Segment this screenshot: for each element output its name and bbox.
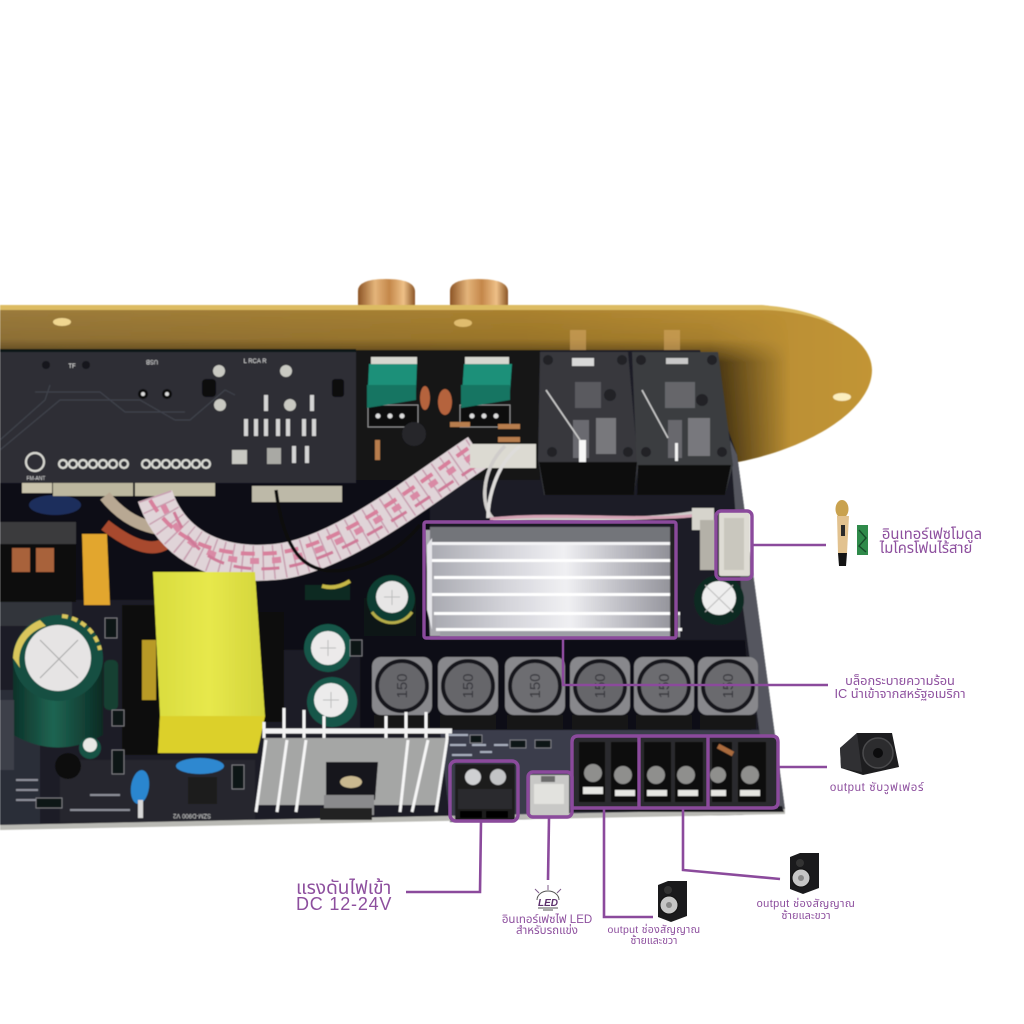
label: output subwoofer: output ซับวูฟเฟอร์ [830, 781, 924, 794]
relays [538, 352, 733, 495]
label: IC heat sink: IC นำเข้าจากสหรัฐอเมริกา [834, 686, 966, 701]
small electrolytic capacitors [304, 575, 744, 727]
green input terminal block [455, 764, 515, 822]
label: wireless mic module: อินเทอร์เฟซโมดูล [882, 527, 982, 543]
blue ceramic capacitors and optocoupler: SZM-D900 V2 [172, 812, 211, 818]
copper inductor and yellow block [0, 522, 110, 626]
label: wireless mic module [879, 527, 982, 557]
audio module daughterboard [0, 349, 356, 483]
row of 150 inductors: 150 [656, 673, 673, 699]
output screw terminals [572, 737, 778, 809]
audio module daughterboard: FM-ANT [27, 476, 45, 482]
icon: LED lamp: LED [538, 898, 558, 909]
label: IC heat sink: บล็อกระบายความร้อน [845, 673, 955, 688]
label: output left and right channel, upper: ซ้ายและขวา [781, 910, 831, 922]
label: input voltage [296, 876, 392, 914]
cream connectors and ribbon cable [22, 444, 716, 571]
highlight frames [424, 511, 778, 821]
audio module daughterboard: L RCA R [243, 359, 267, 365]
icon: green wireless module [857, 525, 868, 555]
audio module daughterboard: USB [146, 358, 158, 364]
upper heatsink [425, 527, 682, 637]
label: output left and right channel, upper [757, 897, 855, 922]
label: wireless mic module: ไมโครโฟนไร้สาย [879, 541, 972, 557]
circuit board base [0, 350, 785, 830]
lower heatsink with regulator [256, 708, 452, 820]
small SMD parts on power section [36, 618, 551, 808]
row of 150 inductors: 150 [720, 673, 737, 699]
icon: wireless microphone [836, 500, 849, 566]
label: output left and right channel, lower [608, 923, 700, 947]
icon: LED lamp [535, 885, 561, 910]
label: IC heat sink [834, 673, 966, 701]
gold faceplate [0, 305, 872, 480]
row of 150 inductors [372, 657, 758, 729]
icon: gold RCA knobs [358, 279, 508, 305]
icon: left speaker [658, 881, 687, 922]
icon: right speaker [790, 853, 819, 894]
leader lines [406, 545, 828, 917]
product photo: amplifier board [0, 279, 872, 830]
row of 150 inductors: 150 [460, 673, 477, 699]
green box capacitors [367, 357, 512, 408]
label: output left and right channel, lower: output ช่องสัญญาณ [608, 923, 700, 936]
label: output left and right channel, lower: ซ้ายและขวา [631, 935, 677, 947]
mainboard small parts on upper centre [356, 350, 540, 480]
label: LED interface: สำหรับรถแข่ง [516, 923, 578, 937]
icon: subwoofer box [840, 733, 899, 775]
label: input voltage: แรงดันไฟเข้า [296, 876, 391, 899]
row of 150 inductors: 150 [527, 673, 544, 699]
audio module daughterboard: TF [68, 364, 76, 370]
white LED connector [530, 775, 569, 815]
blue ceramic capacitors and optocoupler [129, 758, 224, 818]
row of 150 inductors: 150 [394, 673, 411, 699]
large green electrolytic capacitor [0, 615, 118, 779]
label: LED interface [502, 913, 592, 937]
label: LED interface: อินเทอร์เฟซไฟ LED [502, 913, 592, 926]
label: input voltage: DC 12-24V [296, 894, 392, 914]
row of 150 inductors: 150 [592, 673, 609, 699]
white mic connector [719, 512, 750, 576]
yellow transformer [122, 572, 284, 755]
label: output left and right channel, upper: output ช่องสัญญาณ [757, 897, 855, 910]
